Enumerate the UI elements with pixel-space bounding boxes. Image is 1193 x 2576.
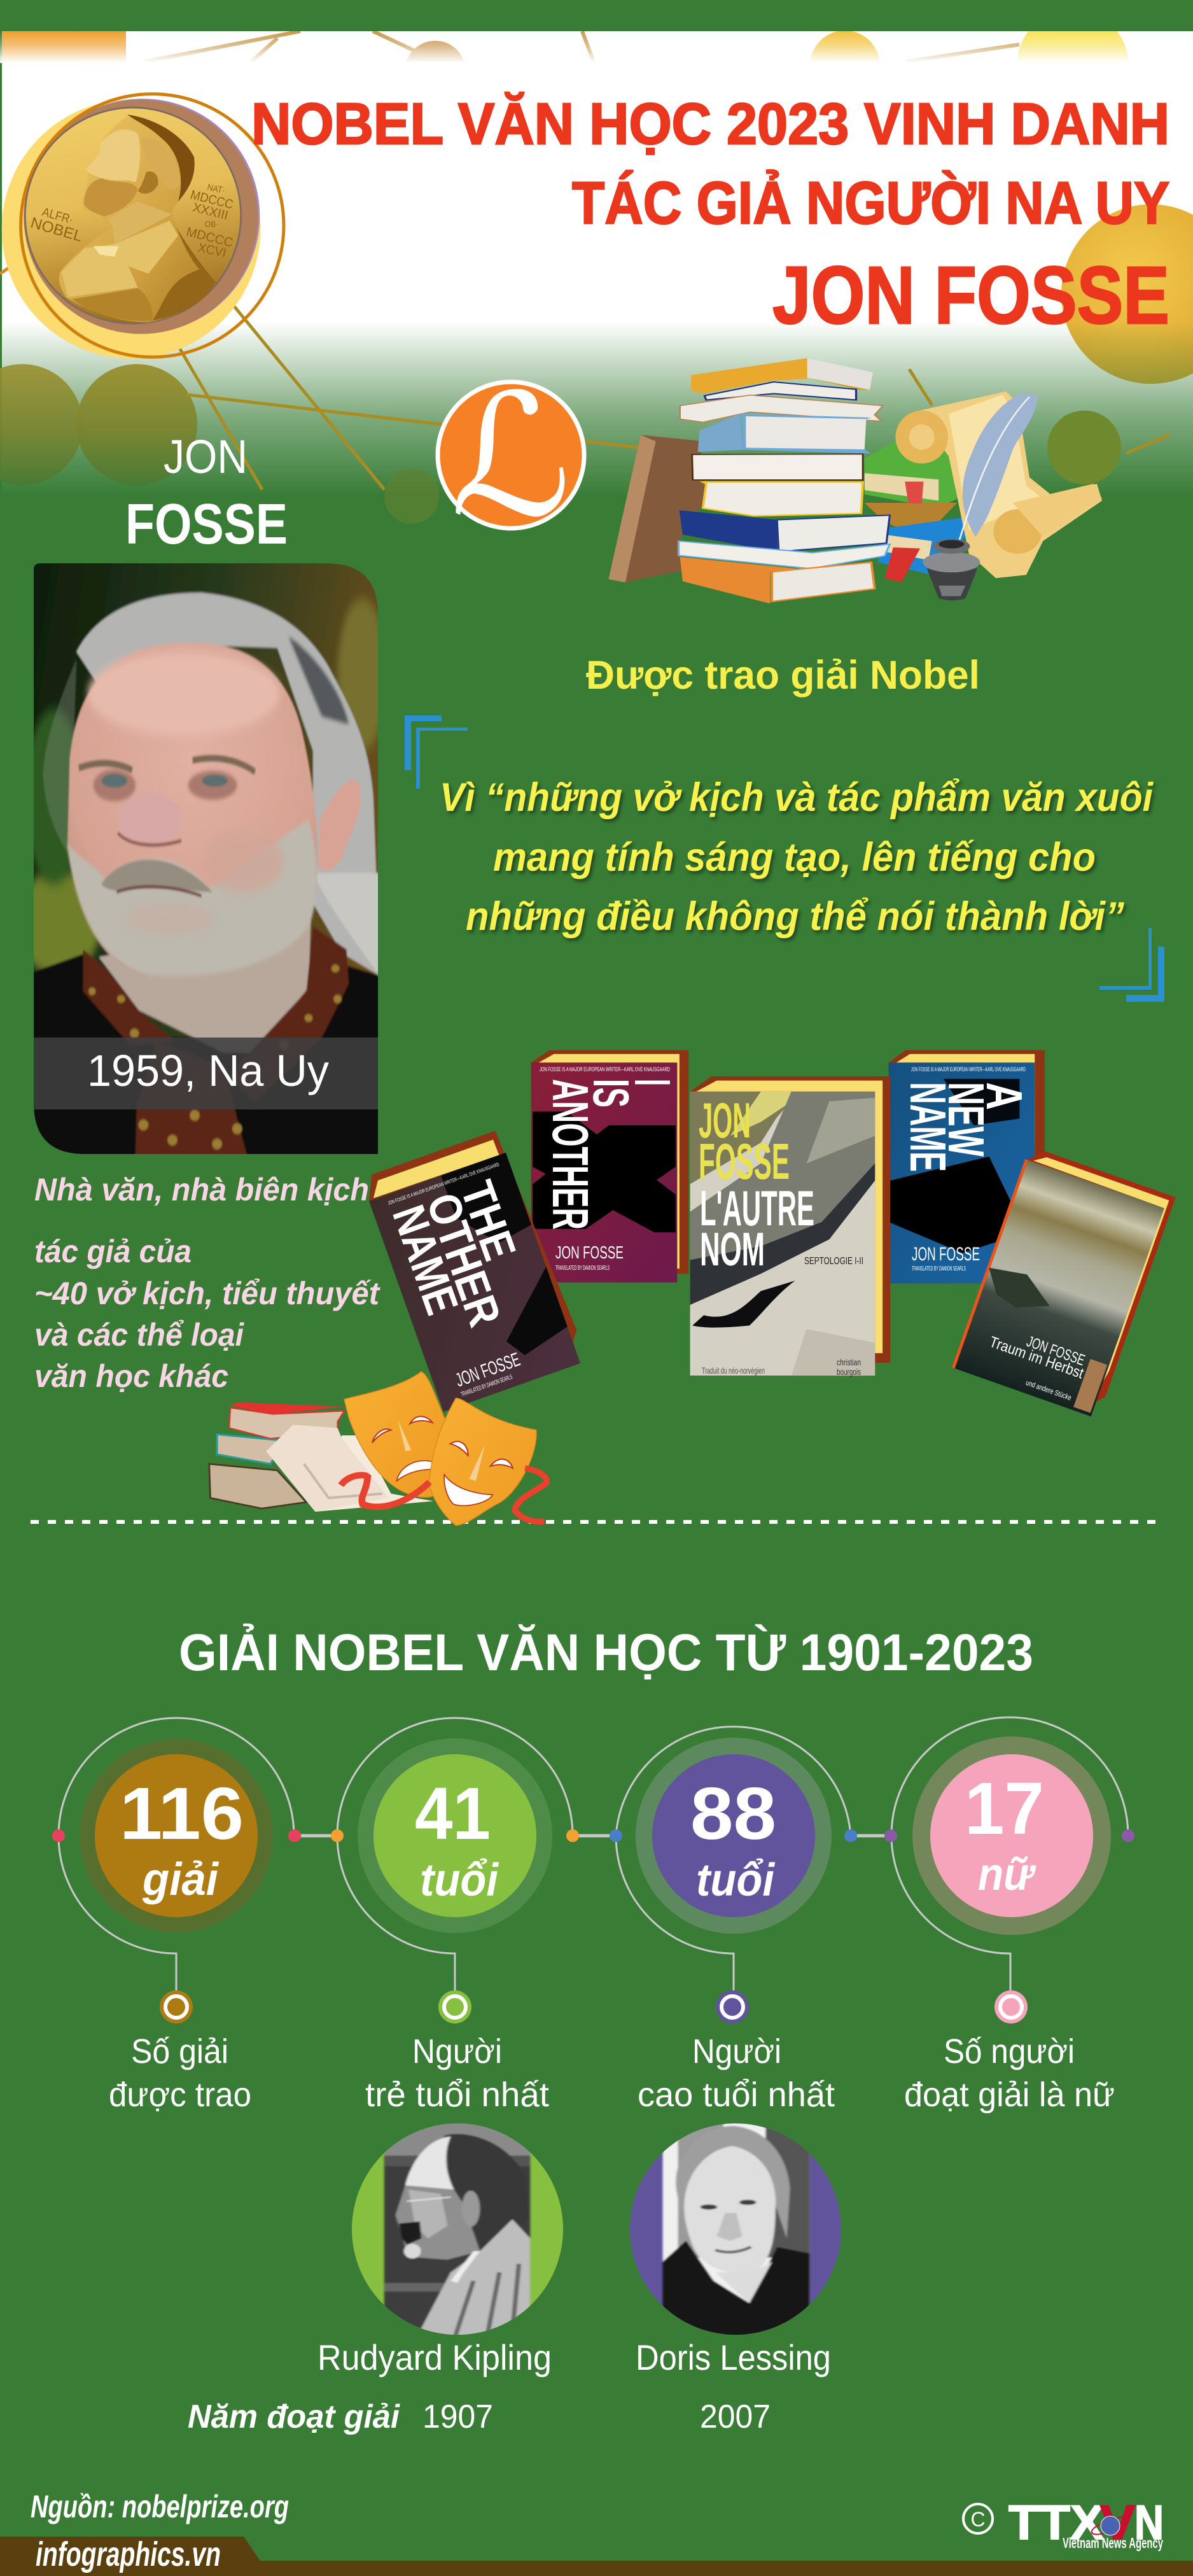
stack: [679, 358, 890, 603]
logo: TTXVN: V: [1100, 2496, 1135, 2550]
book: I Is Another: IS: [583, 1079, 639, 1108]
book: The Other Name: TRANSLATED BY DAMION SEARLS: [460, 1374, 513, 1398]
laureate names: Rudyard Kipling: [317, 2337, 552, 2377]
portrait relief: [59, 115, 216, 323]
book: Traum im Herbst: [952, 1146, 1176, 1419]
book: L'Autre Nom: Traduit du néo-norvégien: [702, 1365, 765, 1376]
ink bottle: [923, 539, 980, 600]
illustration: theatre masks and books: [209, 1372, 547, 1526]
quote brackets: [405, 715, 1164, 1002]
book: I Is Another: JON FOSSE IS A MAJOR EUROPEAN WRITER—KARL OVE KNAUSGAARD: [540, 1066, 670, 1073]
medal inscription: OB·: [205, 220, 218, 229]
book: A New Name: NAME: [900, 1082, 956, 1172]
stat: 88 years: 88: [690, 1772, 776, 1855]
book: The Other Name: OTHER: [417, 1187, 510, 1333]
book: I Is Another: [531, 1050, 688, 1283]
author name: FOSSE: [125, 493, 288, 556]
stat: 17 women: Số người: [944, 2032, 1075, 2071]
stat: 88 years: cao tuổi nhất: [638, 2076, 835, 2114]
author description: ~40 vở kịch, tiểu thuyết: [34, 1276, 380, 1311]
book: The Other Name: [361, 1127, 587, 1412]
laureate names: Doris Lessing: [636, 2337, 831, 2377]
birth caption band: [34, 1038, 378, 1109]
source: Nguồn: nobelprize.org: [31, 2489, 289, 2524]
book: L'Autre Nom: [690, 1076, 890, 1377]
stat: 88 years: Người: [692, 2032, 781, 2071]
jacket: [34, 954, 378, 1154]
stat: 116 prizes: 116: [120, 1772, 244, 1855]
medal inscription: NAT·: [206, 182, 226, 195]
book: L'Autre Nom: christian: [837, 1357, 861, 1367]
stat: 116 prizes: giải: [142, 1854, 220, 1905]
photo: Jon Fosse: [34, 563, 378, 1154]
quote text: mang tính sáng tạo, lên tiếng cho: [493, 835, 1096, 880]
stat: 41 years: trẻ tuổi nhất: [365, 2076, 549, 2114]
book: A New Name: NEW: [938, 1082, 994, 1157]
logo: TTXVN: [963, 2496, 1164, 2551]
book: L'Autre Nom: bourgois: [837, 1367, 861, 1377]
stat: 17 women: nữ: [978, 1849, 1036, 1900]
medal inscription: [29, 182, 235, 260]
eyes and brows: [79, 763, 132, 770]
beard: [67, 820, 317, 977]
logo: TTXVN: C: [970, 2508, 986, 2531]
award years: [188, 2398, 771, 2435]
feather: [957, 393, 1038, 547]
award years: 1907: [422, 2398, 493, 2435]
stat: 116 prizes: [52, 1718, 301, 2114]
logo: TTXVN: N: [1134, 2496, 1164, 2550]
icon: Nobel medal with rings: [2, 94, 284, 358]
book: A New Name: JON FOSSE IS A MAJOR EUROPEAN WRITER—KARL OVE KNAUSGAARD: [911, 1066, 1026, 1073]
book: L'Autre Nom: FOSSE: [699, 1133, 790, 1190]
book: A New Name: JON FOSSE: [912, 1244, 980, 1265]
ribbons: [341, 1475, 429, 1507]
stat: 88 years: tuổi: [696, 1855, 776, 1906]
connectors between stat circles: [295, 1834, 891, 1837]
small books: [209, 1402, 433, 1512]
author description: văn học khác: [34, 1358, 228, 1394]
author description: và các thể loại: [34, 1317, 244, 1353]
photo: Doris Lessing: [630, 2120, 841, 2340]
stat: 41 years: Người: [412, 2032, 502, 2071]
book: I Is Another: I: [624, 1079, 681, 1086]
author description: tác giả của: [34, 1234, 192, 1269]
section divider: [31, 1520, 1161, 1524]
medal inscription: XCVI: [197, 241, 228, 260]
book: I Is Another: JON FOSSE: [555, 1242, 624, 1262]
award years: 2007: [700, 2398, 771, 2435]
heading: awarded: Được trao giải Nobel: [586, 653, 980, 698]
footer bar: [0, 2535, 1193, 2576]
quote text: Vì “những vở kịch và tác phẩm văn xuôi: [440, 775, 1154, 820]
quote text: những điều không thể nói thành lời”: [466, 894, 1124, 939]
laureate names: [317, 2337, 831, 2377]
medal inscription: XXXIII: [191, 201, 230, 223]
neck: [99, 919, 311, 1052]
book: Traum im Herbst: Traum im Herbst: [987, 1334, 1086, 1383]
hair: [76, 593, 380, 976]
face: [67, 643, 317, 976]
stat: 41 years: tuổi: [420, 1855, 499, 1906]
stat: 17 women: đoạt giải là nữ: [904, 2076, 1115, 2114]
book: A New Name: A: [976, 1082, 1033, 1110]
book: The Other Name: JON FOSSE: [453, 1349, 523, 1391]
footer bar: infographics.vn: [36, 2535, 221, 2573]
book: I Is Another: ANOTHER: [542, 1079, 599, 1230]
title: [251, 92, 1169, 341]
ear: [319, 780, 361, 870]
stat: 116 prizes: được trao: [109, 2076, 251, 2114]
book: The Other Name: THE: [450, 1175, 526, 1267]
right mask: [429, 1398, 536, 1526]
leaning book: [608, 435, 706, 582]
logo: TTXVN: TTX: [1008, 2496, 1104, 2550]
book: The Other Name: JON FOSSE IS A MAJOR EUROPEAN WRITER—KARL OVE KNAUSGAARD: [387, 1162, 500, 1206]
scroll: [895, 391, 1102, 578]
author description: [34, 1172, 380, 1394]
book: A New Name: TRANSLATED BY DAMION SEARLS: [912, 1265, 966, 1272]
stat: 88 years: [610, 1727, 857, 2114]
book: Traum im Herbst: JON FOSSE: [1024, 1333, 1087, 1369]
book: A New Name: [889, 1050, 1045, 1283]
medal inscription: MDCCC: [189, 188, 235, 212]
stat: 17 women: 17: [965, 1767, 1044, 1850]
book: L'Autre Nom: L'AUTRE: [700, 1180, 814, 1236]
author description: Nhà văn, nhà biên kịch: [34, 1172, 369, 1207]
photo: Rudyard Kipling: [352, 2120, 563, 2340]
nose: [118, 794, 181, 844]
medal inscription: MDCCC: [185, 225, 235, 250]
icon: literature logo: ℒ: [450, 358, 571, 554]
book: L'Autre Nom: JON: [699, 1092, 751, 1148]
book: I Is Another: TRANSLATED BY DAMION SEARLS: [555, 1265, 610, 1272]
section heading: GIẢI NOBEL VĂN HỌC TỪ 1901-2023: [179, 1624, 1033, 1682]
header backdrop: white fade with gold circles and lines: [0, 10, 1193, 524]
medal inscription: NOBEL: [29, 214, 85, 245]
stat: 41 years: [331, 1718, 579, 2114]
book: Traum im Herbst: und andere Stücke: [1025, 1378, 1073, 1402]
award years: Năm đoạt giải: [188, 2398, 401, 2435]
book: L'Autre Nom: NOM: [700, 1223, 765, 1276]
medal inscription: ALFR·: [41, 206, 74, 227]
author name: JON: [164, 430, 248, 483]
book: L'Autre Nom: SEPTOLOGIE I-II: [804, 1256, 863, 1267]
stat: 116 prizes: Số giải: [131, 2032, 228, 2071]
birth caption: 1959, Na Uy: [87, 1046, 329, 1095]
scarf: [81, 927, 350, 1154]
left mask: [344, 1372, 447, 1497]
illustration: book stack, scroll and quill: [608, 358, 1102, 603]
author name: [125, 430, 288, 556]
quote text: [440, 775, 1154, 939]
stat: 41 years: 41: [415, 1772, 491, 1855]
book: The Other Name: NAME: [382, 1199, 468, 1321]
stat: 17 women: [884, 1717, 1134, 2114]
back books: [865, 441, 966, 582]
